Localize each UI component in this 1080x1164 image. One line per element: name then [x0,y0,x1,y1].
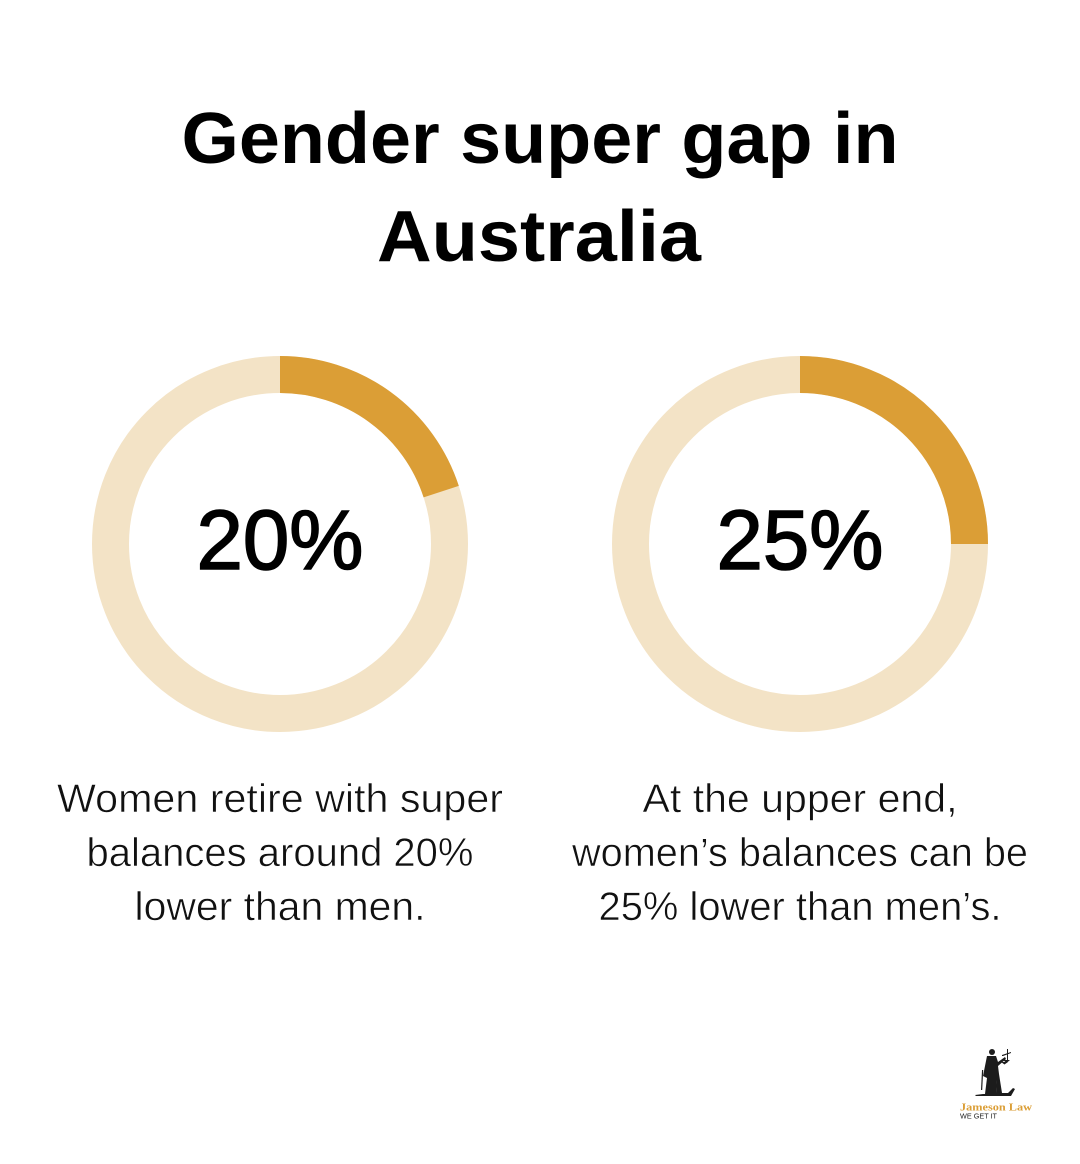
value: 20%: 20% [196,493,364,587]
donut chart: 25% [630,374,970,714]
description: 20%: balances around 20% [86,831,474,875]
description: 25% [571,777,1028,929]
description: 20%: Women retire with super [57,777,503,821]
description: 25%: 25% lower than men’s. [598,885,1002,929]
title: Australia [377,197,702,277]
description: 25%: At the upper end, [642,777,958,821]
icon: lady justice [975,1049,1015,1096]
description: 25%: women’s balances can be [571,831,1028,875]
description: 20%: lower than men. [134,885,426,929]
description: 20% [57,777,503,929]
logo tagline: WE GET IT [960,1114,998,1120]
panel: 20% statistic [57,374,503,929]
title [182,99,899,277]
donut chart: 20% [110,374,450,714]
title: Gender super gap in [182,99,899,179]
logo: Jameson Law [960,1049,1032,1120]
value: 25%: 25% [716,493,884,587]
panel: 25% statistic [571,374,1028,929]
logo name: Jameson Law [960,1102,1032,1114]
